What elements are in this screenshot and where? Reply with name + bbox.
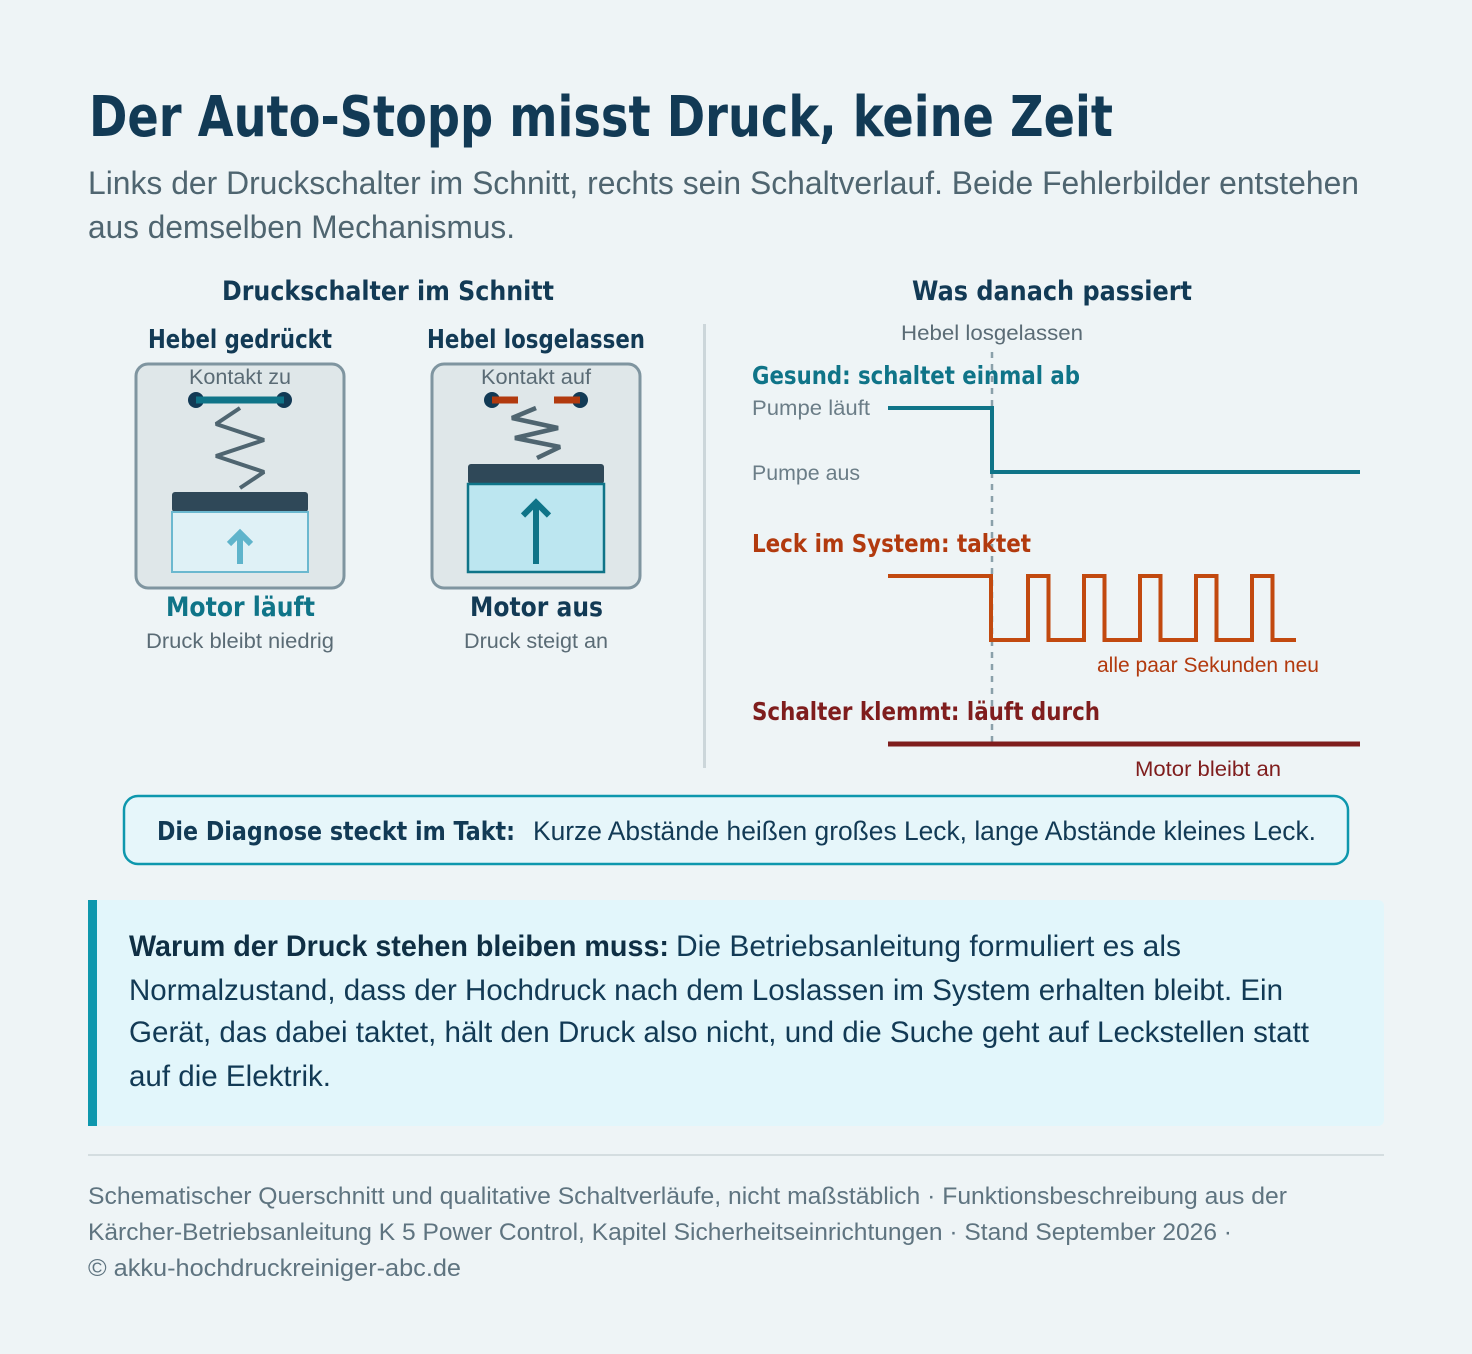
subtitle: Links der Druckschalter im Schnitt, rechts sein Schaltverlauf. Beide Fehlerbilder entstehen: [88, 165, 1359, 201]
callout: diagnosis: Kurze Abstände heißen großes Leck, lange Abstände kleines Leck.: [533, 816, 1316, 846]
motor status: Motor aus: [470, 592, 603, 623]
note panel: Gerät, das dabei taktet, hält den Druck also nicht, und die Suche geht auf Leckstellen statt: [129, 1016, 1310, 1049]
piston plate: [172, 492, 308, 512]
pressure chamber low: [172, 512, 308, 572]
icon: pressure arrow large: [523, 502, 549, 564]
heading: Druckschalter im Schnitt: Druckschalter im Schnitt: [222, 276, 554, 307]
callout: diagnosis: [124, 796, 1348, 864]
pressure status: Druck steigt an: [464, 630, 608, 653]
title: Der Auto-Stopp misst Druck, keine Zeit: [89, 85, 1113, 150]
footer: [88, 1183, 1287, 1282]
footer: Kärcher-Betriebsanleitung K 5 Power Control, Kapitel Sicherheitseinrichtungen · Stand September 2026 ·: [88, 1219, 1232, 1246]
trace heading: Leck im System: taktet: [752, 529, 1031, 558]
closed contact: [188, 392, 292, 408]
axis label off: Pumpe aus: [752, 462, 860, 485]
pulse line: [888, 576, 1296, 640]
note panel: Normalzustand, dass der Hochdruck nach dem Loslassen im System erhalten bleibt. Ein: [129, 974, 1283, 1007]
trace: Schalter klemmt: [752, 697, 1360, 781]
note panel: auf die Elektrik.: [129, 1060, 331, 1093]
open contact: [484, 392, 588, 408]
note panel: Die Betriebsanleitung formuliert es als: [676, 930, 1181, 963]
trace: Gesund: [752, 361, 1360, 485]
axis label on: Pumpe läuft: [752, 397, 870, 420]
trace annotation: Motor bleibt an: [1135, 758, 1281, 781]
time marker label: Hebel losgelassen: [901, 322, 1083, 345]
piston plate: [468, 464, 604, 484]
trace heading: Schalter klemmt: läuft durch: [752, 697, 1100, 726]
flat line: [888, 742, 1360, 746]
subtitle: [88, 165, 1359, 245]
trace annotation: alle paar Sekunden neu: [1097, 654, 1319, 677]
spring compressed: [512, 408, 560, 458]
switch housing: [136, 364, 344, 588]
pressure chamber high: [468, 484, 604, 572]
switch housing: [432, 364, 640, 588]
footer: © akku-hochdruckreiniger-abc.de: [88, 1255, 461, 1282]
callout: diagnosis: Die Diagnose steckt im Takt:: [157, 817, 515, 847]
subtitle: aus demselben Mechanismus.: [88, 209, 515, 245]
trace heading: Gesund: schaltet einmal ab: [752, 361, 1080, 390]
panel: Was danach passiert: [752, 276, 1360, 781]
footer: Schematischer Querschnitt und qualitative Schaltverläufe, nicht maßstäblich · Funktionsbeschreibung aus der: [88, 1183, 1287, 1210]
state heading: Hebel losgelassen: [427, 325, 645, 355]
icon: pressure arrow small: [229, 533, 251, 564]
state: Hebel losgelassen: [427, 325, 645, 653]
state heading: Hebel gedrückt: [148, 325, 332, 355]
pressure status: Druck bleibt niedrig: [146, 630, 334, 653]
trace: Leck im System: [752, 529, 1319, 677]
motor status: Motor läuft: [166, 592, 315, 623]
step line: [888, 408, 1360, 472]
time marker dashed line: [991, 352, 993, 744]
contact label: Kontakt auf: [481, 366, 591, 389]
heading: Was danach passiert: Was danach passiert: [912, 276, 1192, 307]
panel: Druckschalter im Schnitt: [136, 276, 645, 653]
note panel: Warum der Druck stehen bleiben muss:: [129, 930, 669, 963]
note panel: [88, 900, 1384, 1126]
spring: [216, 408, 264, 488]
contact label: Kontakt zu: [189, 366, 291, 389]
state: Hebel gedrückt: [136, 325, 344, 653]
